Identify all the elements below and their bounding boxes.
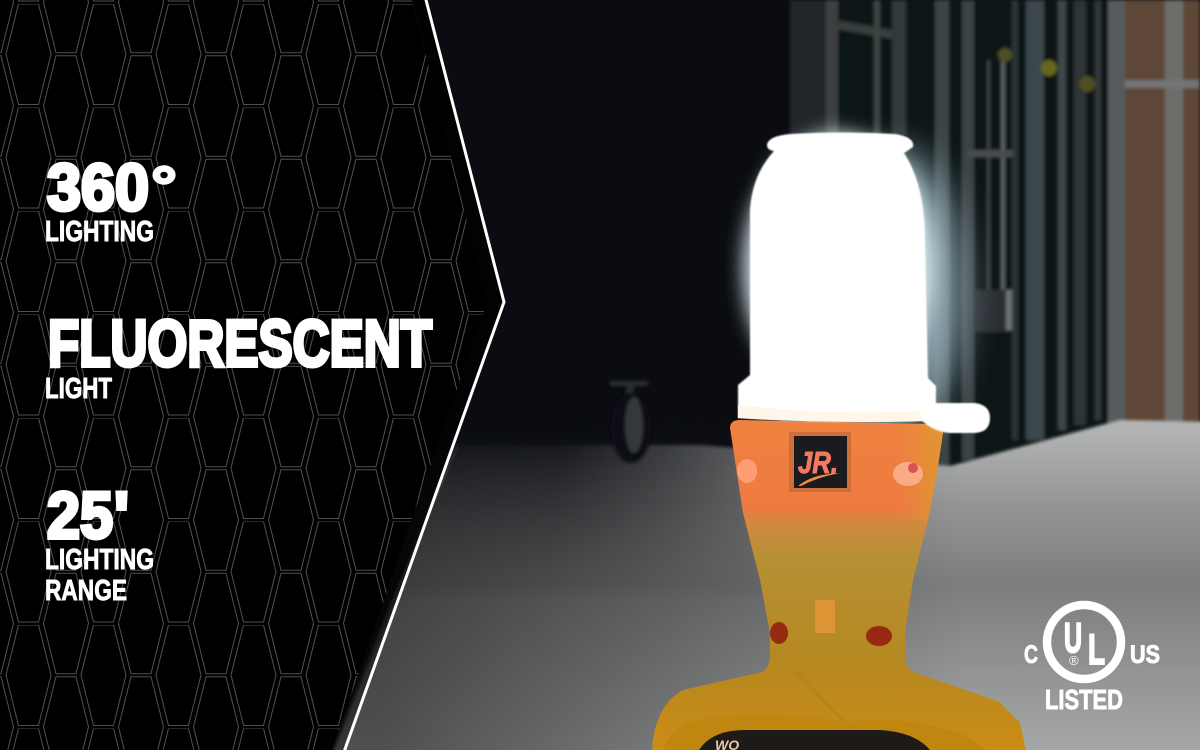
floor shading: [330, 420, 960, 750]
JR logo: [789, 432, 851, 492]
product: work light: [652, 132, 1026, 750]
feature: 360 degree lighting: [45, 150, 177, 248]
lamp base and neck: [652, 420, 1026, 750]
globe warm collar: [738, 405, 922, 422]
feature: 25 foot lighting range: RANGE: [45, 575, 127, 607]
UL listed certification mark: L: [1088, 626, 1105, 674]
UL listed certification mark: US: [1130, 641, 1160, 669]
cart wheel: [610, 381, 651, 463]
upper indicator dots: [737, 459, 923, 486]
glowing globe: [738, 132, 990, 433]
UL listed certification mark: LISTED: [1045, 684, 1123, 715]
chevron strip and white line: [332, 0, 505, 750]
feature: 360 degree lighting: 360: [47, 150, 149, 224]
JR logo: JR.: [798, 445, 838, 480]
feature: 25 foot lighting range: 25: [47, 478, 113, 552]
lower indicator dots: [770, 622, 892, 646]
back wall: metal studs: [790, 0, 1200, 470]
UL listed certification mark: ®: [1069, 653, 1079, 668]
feature: 360 degree lighting: LIGHTING: [45, 216, 154, 248]
base label: [699, 730, 930, 750]
feature: 360 degree lighting: °: [151, 154, 177, 217]
base tray recess: [664, 715, 985, 750]
feature: fluorescent light: LIGHT: [45, 373, 112, 405]
feature: fluorescent light: [45, 306, 432, 405]
lamp glow: [827, 150, 963, 430]
neck side highlight: [913, 424, 943, 520]
switch: [815, 600, 835, 633]
UL listed certification mark: U: [1064, 614, 1082, 661]
feature: fluorescent light: FLUORESCENT: [48, 306, 432, 380]
floor haze near wall: [410, 442, 756, 580]
base crease: [797, 672, 845, 722]
feature: 25 foot lighting range: ': [114, 478, 129, 552]
UL listed certification mark: C: [1024, 641, 1038, 669]
floor: [330, 420, 1200, 750]
feature: 25 foot lighting range: [45, 478, 154, 607]
panel: black hexagon chevron: [0, 0, 487, 750]
feature: 25 foot lighting range: LIGHTING: [45, 544, 154, 576]
UL listed certification mark: [1024, 605, 1160, 715]
background photo: construction site: [332, 0, 1200, 750]
